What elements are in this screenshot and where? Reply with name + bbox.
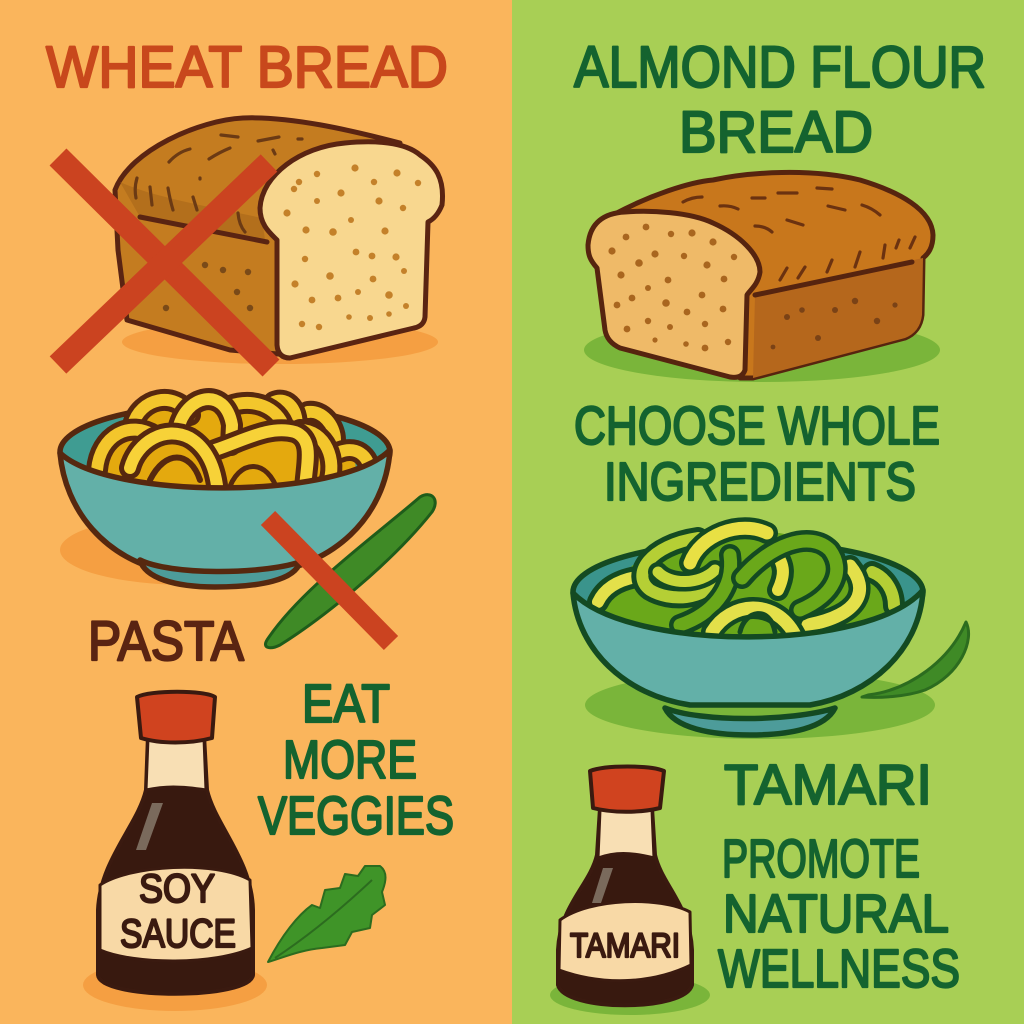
bowl foot [665, 708, 835, 735]
label: soy sauce: SOY [139, 867, 215, 911]
label: tamari: TAMARI [724, 753, 932, 817]
title: wheat bread: WHEAT BREAD [46, 35, 448, 100]
bowl foot [140, 560, 300, 587]
almond bread loaf [584, 172, 940, 382]
almond crust dots [771, 298, 898, 349]
text: choose whole ingredients [574, 396, 940, 512]
label: soy sauce [120, 867, 236, 956]
text: promote natural wellness: NATURAL [723, 884, 949, 944]
text: choose whole ingredients: CHOOSE WHOLE [574, 396, 940, 456]
bottle highlight [592, 868, 613, 903]
text: eat more veggies: MORE [283, 730, 417, 790]
zucchini noodles [598, 528, 894, 635]
text: eat more veggies: VEGGIES [258, 786, 454, 846]
text: eat more veggies: EAT [302, 674, 390, 734]
wheat crust marks [135, 135, 302, 232]
pasta bowl [60, 399, 390, 587]
label: soy sauce: SAUCE [120, 912, 236, 956]
title: almond flour bread: ALMOND FLOUR [574, 35, 986, 100]
wheat crust dots [163, 262, 253, 311]
text: promote natural wellness [718, 829, 960, 999]
pasta noodles [97, 399, 370, 495]
text: choose whole ingredients: INGREDIENTS [604, 452, 916, 512]
zucchini noodle bowl [573, 528, 969, 739]
pasta base [95, 403, 356, 495]
bowl front [60, 450, 390, 572]
label: pasta: PASTA [88, 609, 245, 672]
red cross bar on bean [268, 518, 391, 643]
bottle highlight [136, 803, 163, 850]
text: promote natural wellness: WELLNESS [718, 939, 960, 999]
red cross over bread [58, 157, 271, 368]
wheat crumb speckles [283, 164, 421, 330]
almond crust marks [683, 188, 915, 280]
icon: leaf [268, 866, 386, 962]
green bean [265, 495, 435, 648]
almond crumb speckles [608, 224, 737, 351]
bowl front [573, 590, 923, 705]
title: almond flour bread [574, 35, 986, 165]
text: eat more veggies [258, 674, 454, 846]
text: promote natural wellness: PROMOTE [722, 829, 920, 889]
soy sauce bottle [83, 692, 267, 1011]
tamari bottle [550, 766, 710, 1015]
noodle base [600, 529, 892, 645]
title: almond flour bread: BREAD [679, 100, 873, 165]
panel: almond background [512, 0, 1024, 1024]
wheat bread loaf [115, 118, 443, 364]
label: tamari bottle: TAMARI [570, 927, 680, 965]
panel: wheat background [0, 0, 512, 1024]
